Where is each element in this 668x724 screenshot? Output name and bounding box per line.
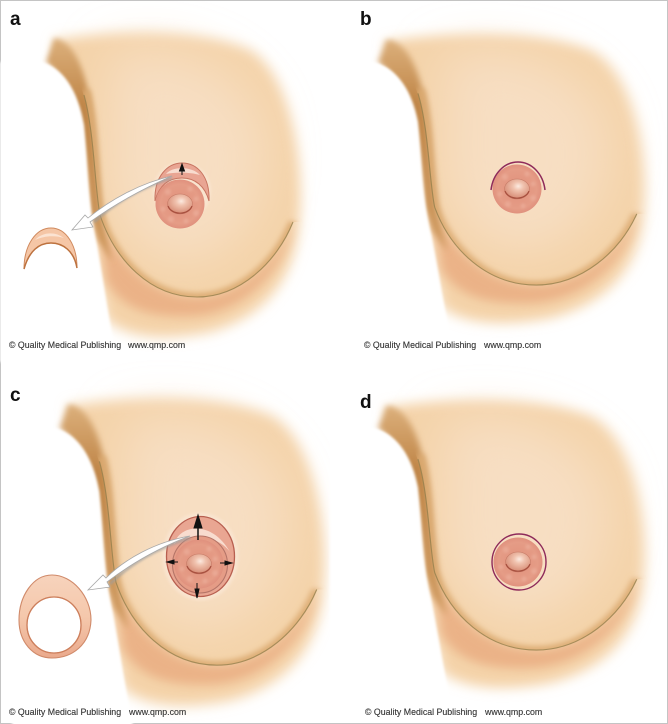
panel a body illustration (0, 33, 300, 362)
panel c nipple-areola (172, 536, 228, 593)
panel b caption: www.qmp.com (483, 340, 541, 350)
panel b nipple-areola (492, 164, 542, 214)
panel b letter: b (360, 9, 372, 30)
panel d suture ring (492, 534, 546, 590)
panel d nipple-areola (494, 538, 542, 586)
panel c expansion arrows (167, 515, 232, 598)
panel d (330, 392, 645, 717)
panel c caption: www.qmp.com (128, 707, 186, 717)
panel a (0, 9, 300, 362)
panel b caption: © Quality Medical Publishing (364, 340, 476, 350)
panel c (9, 385, 324, 724)
panel d body illustration (330, 400, 645, 711)
panel d caption: www.qmp.com (484, 707, 542, 717)
panel d caption: © Quality Medical Publishing (365, 707, 477, 717)
panel c excised ring (19, 575, 91, 658)
panel a wound area (153, 162, 211, 220)
panel b body illustration (330, 34, 645, 347)
panel c wound area (162, 512, 238, 600)
panel a white arrow (72, 176, 172, 230)
panel a letter: a (10, 9, 21, 30)
panel b (330, 9, 645, 350)
panel a upward arrow (180, 164, 184, 175)
panel d letter: d (360, 392, 372, 413)
panel b suture line (491, 162, 545, 190)
panel c letter: c (10, 385, 21, 406)
panel a caption: © Quality Medical Publishing (9, 340, 121, 350)
panel a nipple-areola (156, 180, 204, 228)
panel a excised crescent (24, 228, 77, 269)
panel c body illustration (12, 399, 324, 724)
panel c white arrow (88, 536, 190, 590)
panel c caption: © Quality Medical Publishing (9, 707, 121, 717)
panel a caption: www.qmp.com (127, 340, 185, 350)
